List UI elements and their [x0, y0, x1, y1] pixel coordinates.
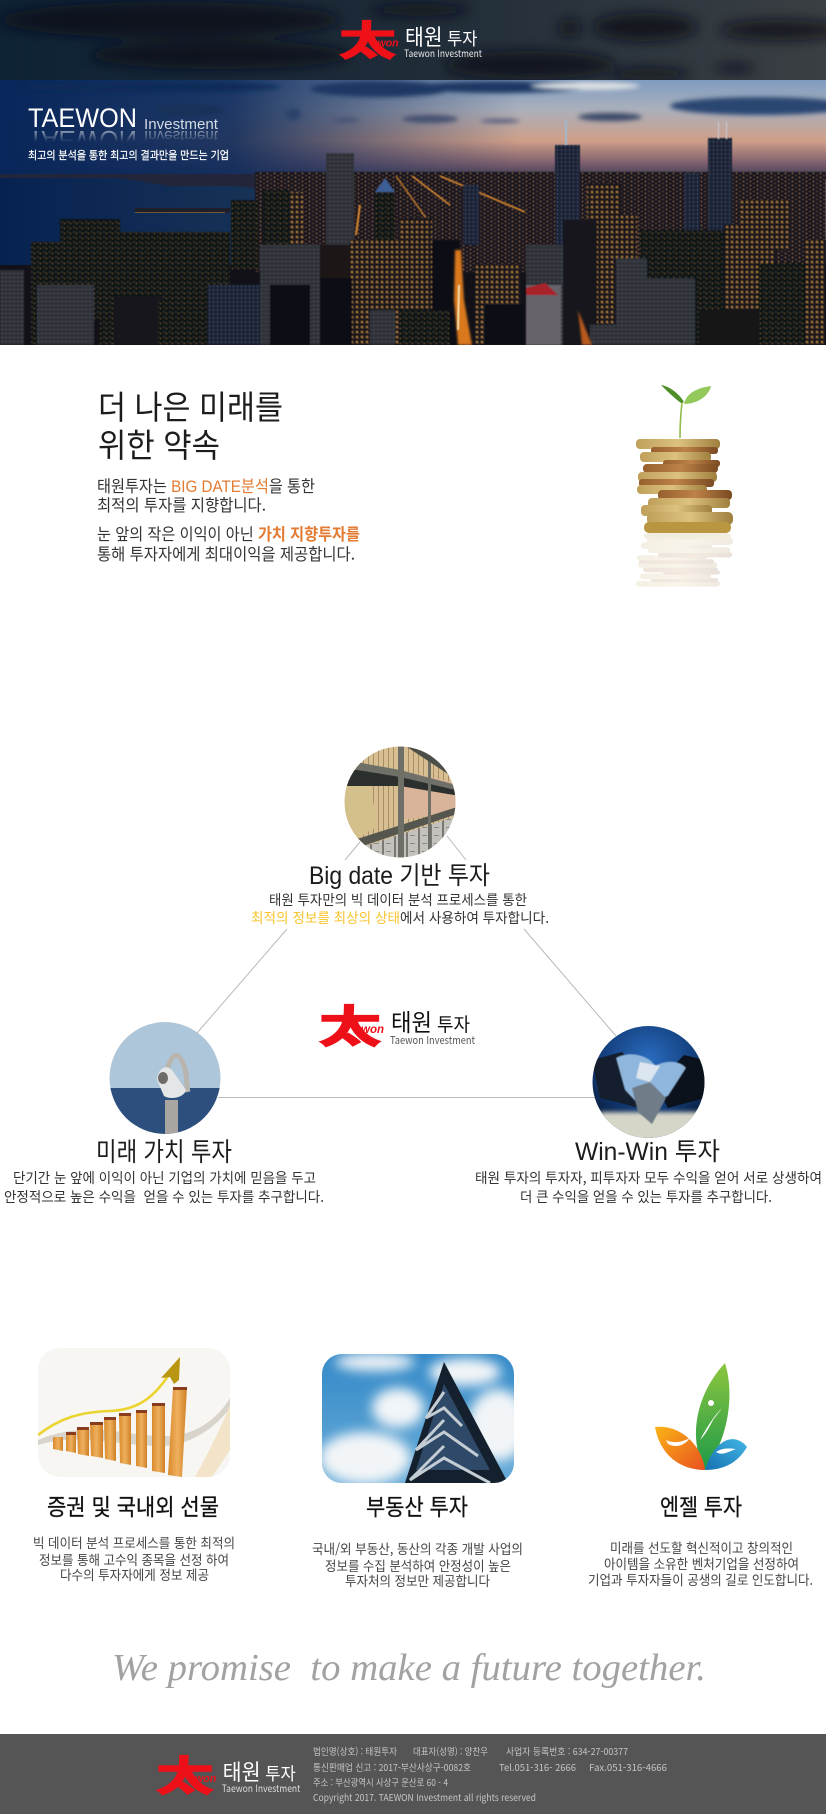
description: 정보를 수집 분석하여 안정성이 높은 [325, 1555, 511, 1575]
company details: 통신판매업 신고 : 2017-부산사상구-0082호 [313, 1760, 471, 1774]
description line 1: 단기간 눈 앞에 이익이 아닌 기업의 가치에 믿음을 두고 [13, 1168, 316, 1188]
company details: Fax.051-316-4666 [589, 1760, 667, 1774]
hero title: TAEWON [28, 125, 137, 155]
heading: 더 나은 미래를 [98, 381, 283, 429]
skyline buildings [0, 120, 826, 345]
avenues of light [356, 176, 525, 235]
description: 아이템을 소유한 벤처기업을 선정하여 [604, 1553, 799, 1573]
heading: 증권 및 국내외 선물 [47, 1488, 219, 1522]
company details: 대표자(성명) : 양찬우 [413, 1744, 488, 1758]
company details: Copyright 2017. TAEWON Investment all rights reserved [313, 1790, 536, 1804]
company details: 주소 : 부산광역시 사상구 운산로 60 - 4 [313, 1775, 448, 1789]
icon: coin stack with sprout [636, 385, 733, 587]
hero title: Investment [144, 117, 218, 133]
company details: 사업자 등록번호 : 634-27-00377 [506, 1744, 628, 1758]
description: 빅 데이터 분석 프로세스를 통한 최적의 [33, 1532, 235, 1552]
bay water [0, 174, 256, 265]
icon: building against sky [319, 1353, 528, 1484]
logo: footer: 太 [156, 1743, 213, 1802]
description: 미래를 선도할 혁신적이고 창의적인 [610, 1537, 793, 1557]
heading: Win-Win 투자 [575, 1138, 720, 1166]
heading: 미래 가치 투자 [96, 1132, 232, 1169]
slogan: We promise to make a future together. [112, 1647, 706, 1689]
paragraph 1 line 2: 최적의 투자를 지향합니다. [97, 492, 266, 516]
distant city lights [255, 172, 826, 272]
triangle connector lines [197, 836, 616, 1098]
logo: footer [156, 1743, 301, 1802]
description: 기업과 투자자들이 공생의 길로 인도합니다. [588, 1569, 813, 1589]
logo: center: Taewon Investment [390, 1032, 475, 1048]
logo: header [339, 8, 482, 67]
description: 다수의 투자자에게 정보 제공 [60, 1564, 209, 1584]
photo: handshake globe [590, 1025, 708, 1142]
logo: header: 太 [339, 8, 396, 67]
heading: 위한 약속 [98, 419, 220, 467]
icon: rising bar chart [38, 1348, 230, 1477]
description: 투자처의 정보만 제공합니다 [345, 1570, 491, 1590]
description line 2: 더 큰 수익을 얻을 수 있는 투자를 추구합니다. [520, 1187, 772, 1207]
paragraph 2 line 2: 통해 투자자에게 최대이익을 제공합니다. [97, 541, 355, 565]
company details: 법인명(상호) : 태원투자 [313, 1744, 397, 1758]
description [312, 1538, 523, 1590]
sky [0, 80, 826, 180]
service: real estate [312, 1353, 528, 1590]
node: future value [4, 1020, 324, 1207]
logo: header: Taewon Investment [404, 45, 482, 60]
footer [0, 1734, 826, 1814]
description line 1: 태원 투자만의 빅 데이터 분석 프로세스를 통한 [269, 890, 527, 910]
orange street [454, 250, 472, 345]
logo: center: won [361, 1022, 384, 1036]
heading: 엔젤 투자 [660, 1488, 742, 1522]
hero tagline: 최고의 분석을 통한 최고의 결과만을 만드는 기업 [28, 147, 229, 163]
description: 국내/외 부동산, 동산의 각종 개발 사업의 [312, 1538, 523, 1558]
logo: header: 투자 [447, 26, 477, 51]
city base [0, 262, 826, 345]
heading [98, 381, 283, 467]
description line 2: 안정적으로 높은 수익을 얻을 수 있는 투자를 추구합니다. [4, 1187, 324, 1207]
header band [0, 0, 826, 80]
logo: center: 太 [319, 991, 381, 1055]
heading: 부동산 투자 [366, 1488, 468, 1522]
logo: footer: 투자 [265, 1761, 296, 1786]
description [33, 1532, 235, 1584]
logo: center [319, 991, 475, 1055]
hero title: TAEWON [28, 103, 137, 133]
logo: center: 태원 [391, 1003, 432, 1038]
logo: footer: 태원 [223, 1755, 261, 1787]
icon: three leaves with figures [655, 1363, 747, 1470]
service: securities [33, 1348, 235, 1584]
paragraph 2: 눈 앞의 작은 이익이 아닌 가치 지향투자를 [97, 521, 360, 545]
paragraph 1: 태원투자는 BIG DATE분석을 통한 [97, 477, 315, 496]
description line 1: 태원 투자의 투자자, 피투자자 모두 수익을 얻어 서로 상생하여 [475, 1168, 822, 1188]
description: 정보를 통해 고수익 종목을 선정 하여 [39, 1549, 229, 1569]
logo: center: 투자 [437, 1010, 470, 1037]
logo: header: 태원 [405, 21, 443, 52]
logo: footer: Taewon Investment [222, 1780, 301, 1795]
service: angel [588, 1363, 813, 1589]
photo: binocular viewer [110, 1022, 220, 1134]
hero title: Investment [144, 127, 218, 143]
description line 2: 최적의 정보를 최상의 상태에서 사용하여 투자합니다. [251, 908, 549, 928]
description [588, 1537, 813, 1589]
company details [313, 1744, 667, 1804]
photo: archive shelves [344, 746, 456, 858]
hero: city skyline photo [0, 80, 826, 345]
section: promise text [97, 381, 360, 565]
hero title [28, 108, 218, 141]
logo: header: won [378, 38, 399, 50]
logo: footer: won [195, 1773, 216, 1785]
node: big data [251, 745, 549, 928]
heading: Big date 기반 투자 [309, 862, 490, 890]
company details: Tel.051-316- 2666 [499, 1760, 576, 1774]
node: win-win [475, 1025, 822, 1207]
